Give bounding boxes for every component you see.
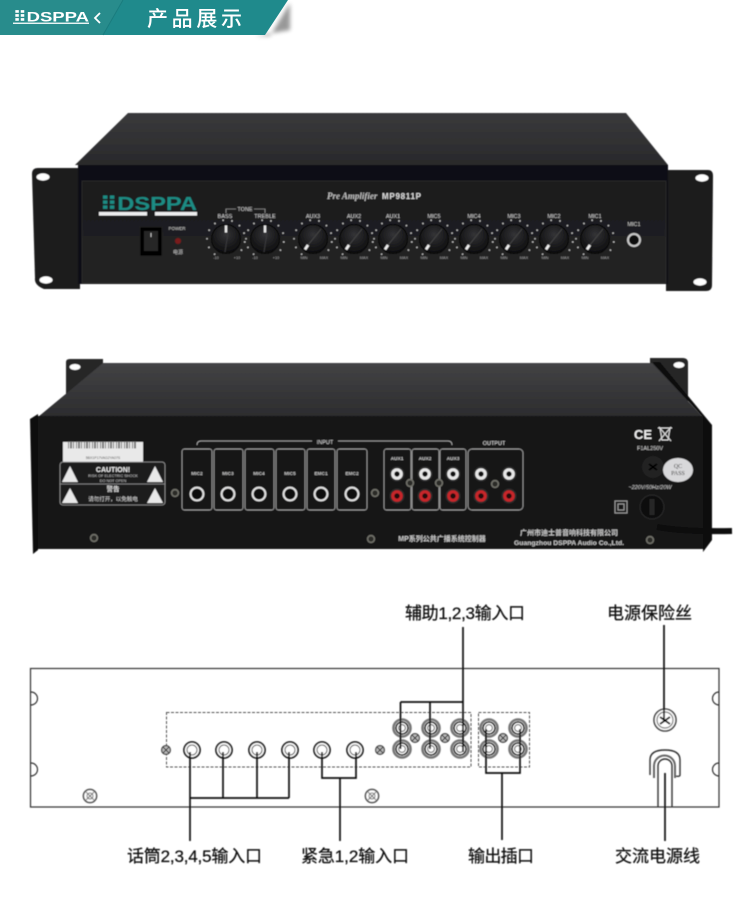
knob scale labels: MIN <box>301 256 308 260</box>
barcode label: 5BX1P17VAG2YA07S <box>86 456 121 460</box>
certification marks: CE <box>634 427 652 442</box>
mic and emc inputs <box>182 449 367 510</box>
knob scale labels: MAX <box>320 256 329 260</box>
input jacks <box>184 742 363 758</box>
knob labels: MIC1 <box>588 214 602 220</box>
power cable <box>657 527 732 531</box>
diagram labels: 辅助1,2,3输入口 <box>405 604 525 623</box>
mic jack: MIC1 <box>627 222 641 228</box>
diagram labels <box>127 604 700 866</box>
mic and emc inputs: MIC3 <box>222 471 234 477</box>
rear top cover <box>38 363 703 417</box>
power indicator: POWER <box>168 226 186 231</box>
tone label <box>226 207 265 213</box>
connection diagram <box>30 604 719 866</box>
model name <box>327 191 422 201</box>
caution plate: 请勿打开，以免触电 <box>88 495 138 503</box>
right rack ear <box>666 170 713 291</box>
tone label: TONE <box>237 207 253 213</box>
knob scale labels: MIN <box>381 256 388 260</box>
rear panel <box>38 416 703 549</box>
leader lines <box>190 625 665 841</box>
knob scale labels: MIN <box>501 256 508 260</box>
aux and output sockets: AUX2 <box>419 456 432 462</box>
knob scale labels: MAX <box>400 256 409 260</box>
diagram labels: 话筒2,3,4,5输入口 <box>127 847 262 866</box>
power indicator <box>168 226 186 256</box>
diagram labels: 电源保险丝 <box>607 604 692 623</box>
mic jack <box>627 222 641 246</box>
dashed socket areas <box>166 712 530 767</box>
knob scale labels: MAX <box>480 256 489 260</box>
barcode label <box>63 442 143 462</box>
fuse drawing <box>654 709 676 731</box>
caution plate: CAUTION! <box>96 467 130 474</box>
rear company text: Guangzhou DSPPA Audio Co.,Ltd. <box>514 540 624 547</box>
caution plate: DO NOT OPEN <box>100 479 127 483</box>
knob scale labels: MAX <box>601 256 610 260</box>
qc pass sticker <box>663 458 693 482</box>
aux and output sockets: AUX3 <box>447 456 460 462</box>
rear side flaps <box>30 362 712 554</box>
aux and output sockets: OUTPUT <box>483 441 506 447</box>
certification marks <box>634 427 672 452</box>
knob scale labels: -10 <box>252 256 258 260</box>
knob labels: AUX3 <box>306 214 320 220</box>
caution plate: 警告 <box>106 484 120 493</box>
mic and emc inputs: MIC5 <box>284 471 296 477</box>
rear screws <box>90 479 654 544</box>
back chevron <box>95 13 100 23</box>
brand logo: ⠿DSPPA <box>13 8 89 24</box>
certification marks: F1AL250V <box>637 446 663 452</box>
rca sockets <box>394 720 526 758</box>
knob scale labels: +10 <box>273 256 279 260</box>
fuse holder <box>642 456 664 478</box>
top cover <box>75 113 668 165</box>
knob scale labels: MIN <box>582 256 589 260</box>
knob labels: MIC2 <box>547 214 561 220</box>
power cord drawing <box>650 750 680 807</box>
knob labels: MIC4 <box>467 214 481 220</box>
qc pass sticker: QC <box>674 464 682 470</box>
rear company text: 广州市迪士普音响科技有限公司 <box>520 528 618 537</box>
input bracket: INPUT <box>317 440 334 446</box>
input bracket <box>197 440 452 446</box>
knob scale labels: MAX <box>440 256 449 260</box>
mic and emc inputs: MIC2 <box>191 471 203 477</box>
diagram labels: 交流电源线 <box>615 847 700 866</box>
diagram labels: 紧急1,2输入口 <box>301 847 409 866</box>
knob labels: BASS <box>218 214 233 220</box>
knob scale labels <box>213 256 610 260</box>
mic and emc inputs: EMC1 <box>314 471 328 477</box>
rear rack ears <box>66 358 688 404</box>
knob labels: MIC3 <box>507 214 521 220</box>
qc pass sticker: PASS <box>671 471 685 477</box>
knob labels: AUX2 <box>347 214 361 220</box>
knob scale labels: MIN <box>421 256 428 260</box>
knob labels: AUX1 <box>386 214 400 220</box>
mic and emc inputs: EMC2 <box>345 471 359 477</box>
model name: MP9811P <box>382 192 422 201</box>
caution plate <box>60 462 165 505</box>
rear company text <box>398 528 624 547</box>
knob scale labels: MAX <box>561 256 570 260</box>
power indicator: 电源 <box>173 249 183 256</box>
mic and emc inputs: MIC4 <box>253 471 265 477</box>
banner title: 产品展示 <box>147 8 242 31</box>
panel logo: ⠿DSPPA <box>100 194 197 214</box>
knob scale labels: +10 <box>234 256 240 260</box>
front panel <box>78 165 668 284</box>
power inlet <box>640 495 664 519</box>
knob scale labels: MAX <box>520 256 529 260</box>
front view of amplifier <box>32 113 713 291</box>
diagram labels: 输出插口 <box>468 847 534 866</box>
knob scale labels: MIN <box>461 256 468 260</box>
aux and output sockets: AUX1 <box>391 456 404 462</box>
rear view of amplifier <box>30 358 732 554</box>
power switch <box>140 227 162 256</box>
double insulation symbol <box>615 501 627 513</box>
caution plate: RISK OF ELECTRIC SHOCK <box>88 474 138 478</box>
header banner <box>0 0 290 36</box>
knob scale labels: MAX <box>360 256 369 260</box>
knob labels: MIC5 <box>427 214 441 220</box>
left rack ear <box>32 168 80 289</box>
chassis outline <box>30 668 719 807</box>
knob labels: TREBLE <box>254 214 276 220</box>
knob labels <box>218 214 602 220</box>
aux and output sockets <box>384 441 523 510</box>
knob scale labels: MIN <box>542 256 549 260</box>
knob scale labels: -10 <box>213 256 219 260</box>
model name: Pre Amplifier <box>327 191 378 201</box>
diagram screws <box>83 734 507 803</box>
voltage text: ~220V/50Hz/20W <box>628 485 672 491</box>
knob scale labels: MIN <box>341 256 348 260</box>
rear company text: MP系列公共广播系统控制器 <box>398 534 486 543</box>
knob row <box>200 213 621 265</box>
